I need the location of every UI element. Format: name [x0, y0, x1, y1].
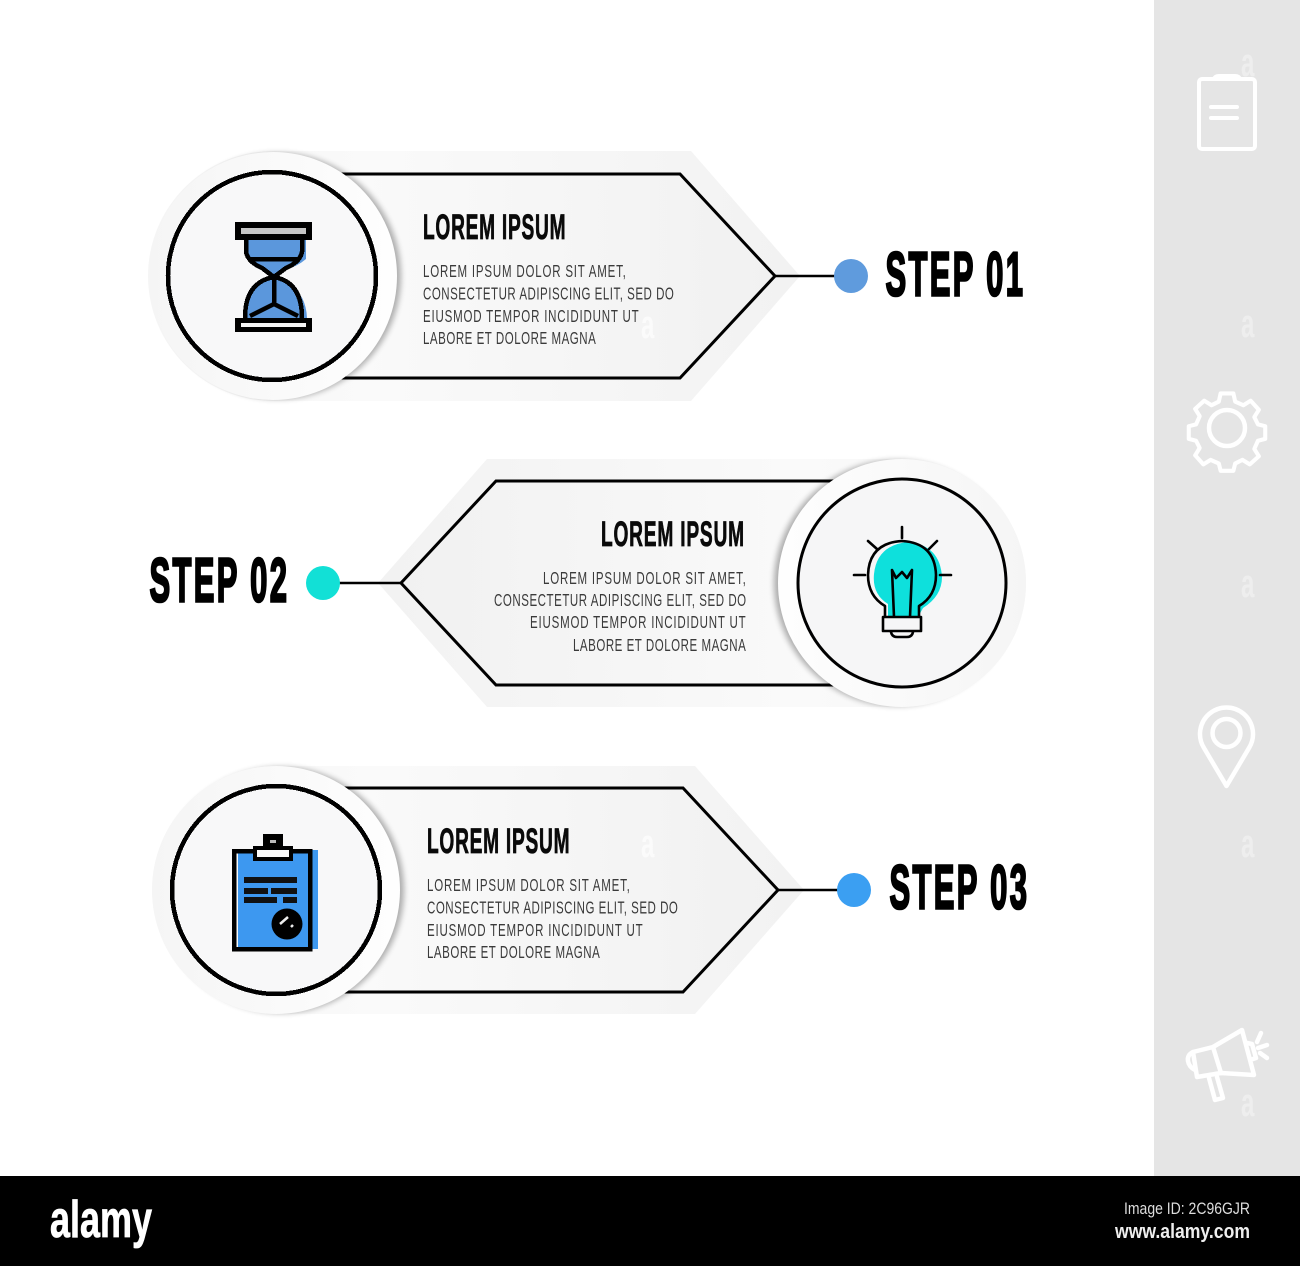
- panel: step 02: [150, 459, 1026, 707]
- step label: STEP 03: [890, 854, 1027, 922]
- connector and dot: [778, 873, 871, 907]
- text block: LABORE ET DOLORE MAGNA: [423, 329, 597, 349]
- panel: step 01: [148, 151, 1023, 401]
- connector and dot: [775, 259, 868, 293]
- icon: gear outline: [1189, 393, 1265, 471]
- text block: EIUSMOD TEMPOR INCIDIDUNT UT: [423, 307, 639, 327]
- watermark letters: a: [1241, 301, 1255, 345]
- footer image id: Image ID: 2C96GJR: [1124, 1199, 1250, 1218]
- text block: [423, 262, 674, 349]
- step label: STEP 01: [886, 241, 1023, 309]
- watermark letters: a: [1241, 561, 1255, 605]
- text block: LABORE ET DOLORE MAGNA: [427, 943, 601, 963]
- watermark letters: a: [1241, 1080, 1255, 1124]
- step label: STEP 02: [150, 547, 287, 615]
- text block: LOREM IPSUM DOLOR SIT AMET,: [427, 876, 630, 896]
- icon: clipboard outline: [1199, 76, 1255, 149]
- faint watermark letters on panels: a: [641, 821, 655, 865]
- icon ring: clipboard: [172, 786, 380, 994]
- faint watermark letters on panels: a: [641, 302, 655, 346]
- footer url: www.alamy.com: [1114, 1221, 1250, 1243]
- text block: EIUSMOD TEMPOR INCIDIDUNT UT: [530, 613, 746, 633]
- icon ring: light bulb: [798, 479, 1006, 687]
- text block: LABORE ET DOLORE MAGNA: [573, 636, 747, 656]
- text block: [427, 876, 678, 963]
- footer bar: [0, 1176, 1300, 1266]
- heading: LOREM IPSUM: [427, 822, 570, 862]
- text block: LOREM IPSUM DOLOR SIT AMET,: [423, 262, 626, 282]
- footer logo: alamy: [50, 1191, 152, 1249]
- connector and dot: [306, 566, 401, 600]
- icon: megaphone outline: [1188, 1030, 1267, 1100]
- text block: [494, 569, 747, 656]
- text block: CONSECTETUR ADIPISCING ELIT, SED DO: [423, 284, 674, 304]
- faint watermark letters on panels: [641, 302, 655, 865]
- icon: map pin outline: [1200, 708, 1253, 786]
- watermark letters: a: [1241, 40, 1255, 84]
- watermark letters: [1241, 40, 1255, 1124]
- heading: LOREM IPSUM: [601, 515, 744, 555]
- text block: EIUSMOD TEMPOR INCIDIDUNT UT: [427, 921, 643, 941]
- watermark letters: a: [1241, 821, 1255, 865]
- text block: LOREM IPSUM DOLOR SIT AMET,: [543, 569, 746, 589]
- text block: CONSECTETUR ADIPISCING ELIT, SED DO: [427, 898, 678, 918]
- sidebar panel: [1154, 0, 1300, 1176]
- text block: CONSECTETUR ADIPISCING ELIT, SED DO: [494, 591, 746, 611]
- panel: step 03: [152, 766, 1027, 1014]
- icon ring: hourglass: [168, 172, 376, 380]
- heading: LOREM IPSUM: [423, 208, 566, 248]
